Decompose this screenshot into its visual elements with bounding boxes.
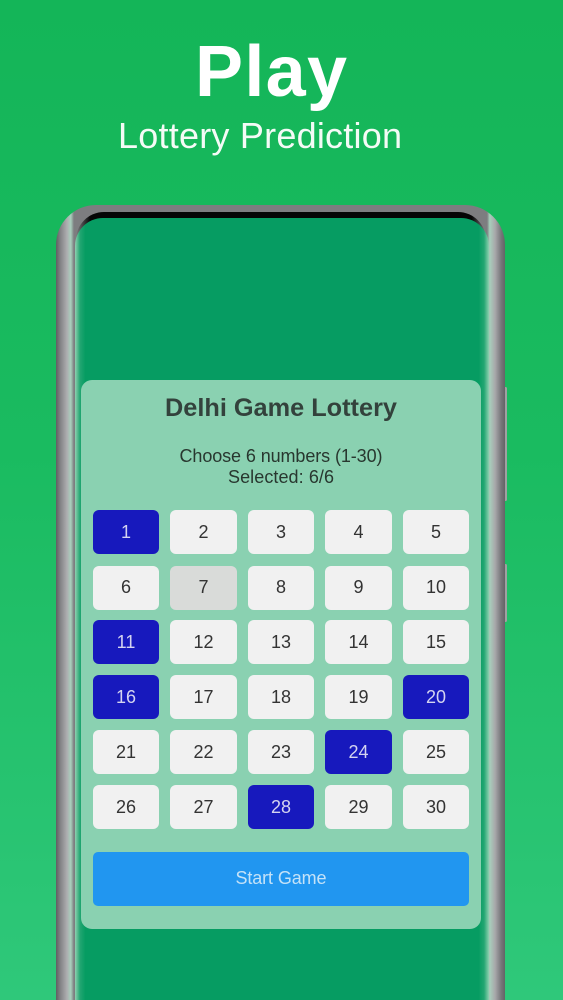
row 1: 2 xyxy=(198,522,209,542)
row 3: 11 xyxy=(117,632,135,652)
row 2 xyxy=(93,566,469,610)
phone mockup xyxy=(56,205,507,1000)
row 3: 12 xyxy=(193,632,214,652)
row 4: 19 xyxy=(348,687,369,707)
row 6 xyxy=(93,785,469,829)
row 5: 22 xyxy=(193,742,214,762)
row 4: 16 xyxy=(116,687,136,707)
panel: game card xyxy=(81,380,481,929)
row 5: 24 xyxy=(348,742,369,762)
row 3: 13 xyxy=(271,632,291,652)
start game button xyxy=(93,852,469,906)
start game button: Start Game xyxy=(236,868,326,888)
row 5: 23 xyxy=(271,742,291,762)
row 6: 29 xyxy=(348,797,369,817)
row 2: 9 xyxy=(353,577,364,597)
instruction text xyxy=(180,446,382,487)
row 6: 28 xyxy=(271,797,291,817)
instruction text: Choose 6 numbers (1-30) xyxy=(180,446,382,466)
row 6: 30 xyxy=(426,797,446,817)
row 4 xyxy=(93,675,469,719)
row 4: 18 xyxy=(271,687,291,707)
card heading: Delhi Game Lottery xyxy=(165,394,397,422)
row 1: 5 xyxy=(431,522,441,542)
row 3 xyxy=(93,620,469,664)
row 5 xyxy=(93,730,469,774)
row 1: 4 xyxy=(353,522,364,542)
instruction text: Selected: 6/6 xyxy=(228,467,334,487)
title: Play xyxy=(195,32,347,112)
row 3: 14 xyxy=(348,632,369,652)
number grid xyxy=(93,510,469,829)
phone frame xyxy=(56,205,505,1000)
row 3: 15 xyxy=(426,632,446,652)
row 5: 21 xyxy=(116,742,136,762)
row 2: 7 xyxy=(198,577,209,597)
row 1: 3 xyxy=(276,522,286,542)
subtitle: Lottery Prediction xyxy=(118,115,402,156)
row 4: 20 xyxy=(426,687,446,707)
row 6: 27 xyxy=(193,797,214,817)
row 4: 17 xyxy=(193,687,214,707)
side buttons xyxy=(503,387,507,622)
row 1: 1 xyxy=(121,522,131,542)
row 1 xyxy=(93,510,469,554)
black bezel xyxy=(76,212,486,272)
row 2: 8 xyxy=(276,577,286,597)
row 6: 26 xyxy=(116,797,136,817)
phone screen xyxy=(75,218,489,1000)
row 2: 10 xyxy=(426,577,446,597)
row 2: 6 xyxy=(121,577,131,597)
row 5: 25 xyxy=(426,742,446,762)
